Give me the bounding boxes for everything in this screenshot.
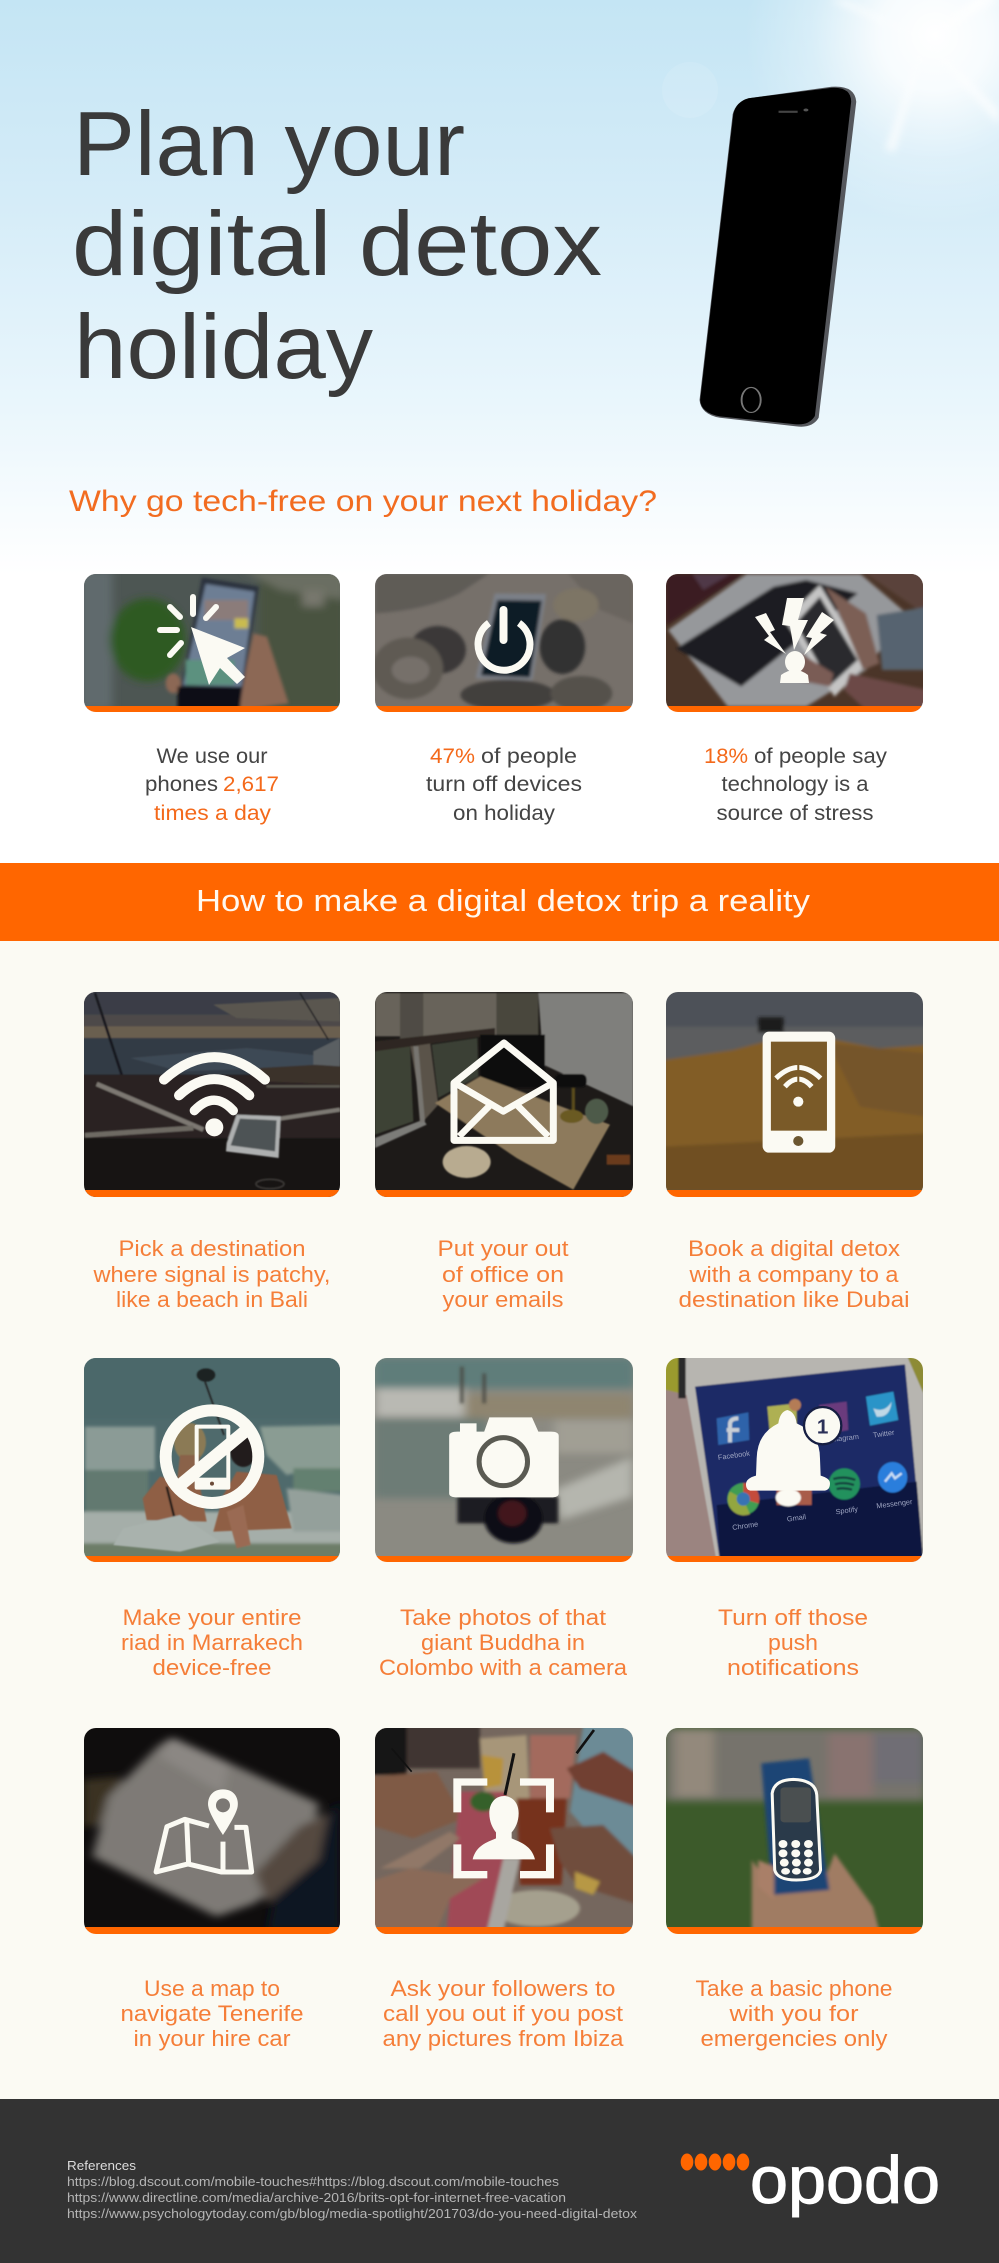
- text: phone use stat: times a day: [154, 802, 272, 825]
- panel: notifications card: Instagram: [826, 1432, 859, 1444]
- caption: Colombo: [379, 1605, 628, 1680]
- orange strip: [84, 1556, 340, 1562]
- caption: beach in Bali: [92, 1236, 330, 1312]
- caption: Ibiza: any pictures from Ibiza: [382, 2026, 624, 2051]
- orange strip: [666, 1927, 923, 1934]
- icon: bell with badge: 1: [817, 1416, 828, 1439]
- caption: basic phone: emergencies only: [700, 2026, 888, 2051]
- references: References: [67, 2159, 136, 2173]
- text: stress stat: of people say: [754, 745, 888, 768]
- caption: basic phone: Take a basic phone: [696, 1976, 892, 2001]
- caption: basic phone: [696, 1976, 892, 2051]
- text: turn off devices stat: of people: [481, 745, 577, 768]
- text: stress stat: [704, 745, 888, 825]
- caption: Dubai: with a company to a: [688, 1262, 899, 1287]
- caption: Marrakech: riad in Marrakech: [121, 1630, 303, 1655]
- text: phone use stat: [145, 745, 279, 825]
- orange strip: [666, 1190, 923, 1197]
- caption: Ibiza: call you out if you post: [383, 2001, 623, 2026]
- caption: notifications: Turn off those: [718, 1605, 868, 1630]
- orange banner: How to make a digital detox trip a reality: [196, 883, 811, 918]
- caption: Dubai: destination like Dubai: [678, 1287, 910, 1312]
- icon: phone with broken wifi: [763, 1032, 835, 1153]
- orange strip: [375, 1556, 633, 1562]
- caption: Marrakech: Make your entire: [122, 1605, 302, 1630]
- text: turn off devices stat: [426, 745, 582, 825]
- orange strip: [666, 1556, 923, 1562]
- references: https://blog.dscout.com/mobile-touches#https://blog.dscout.com/mobile-touches: [67, 2175, 559, 2189]
- panel: notifications card: [660, 1355, 930, 1568]
- caption: beach in Bali: like a beach in Bali: [116, 1287, 308, 1312]
- text: turn off devices stat: on holiday: [453, 802, 556, 825]
- caption: Colombo: Take photos of that: [400, 1605, 606, 1630]
- phone illustration: [700, 87, 856, 427]
- panel: stress photo card: [663, 570, 928, 712]
- text: phone use stat: phones: [145, 773, 218, 796]
- panel: power-off photo card: [367, 570, 638, 712]
- title: holiday: [74, 297, 374, 398]
- cream background: [0, 940, 999, 2100]
- text: stress stat: source of stress: [716, 802, 874, 825]
- icon: wifi: [164, 1057, 265, 1136]
- text: turn off devices stat: turn off devices: [426, 773, 582, 796]
- caption: out of office: of office on: [442, 1262, 564, 1287]
- caption: out of office: Put your out: [438, 1236, 568, 1261]
- icon: power button: [478, 610, 530, 670]
- opodo logo: opodo: [750, 2143, 940, 2218]
- icon: cursor click: [160, 597, 245, 685]
- icon: camera: [449, 1417, 559, 1497]
- icon: envelope: [454, 1043, 553, 1140]
- icon: basic phone outline: [772, 1779, 821, 1880]
- caption: Ibiza: [382, 1976, 624, 2051]
- orange strip: [84, 706, 340, 712]
- caption: Tenerife: Use a map to: [144, 1976, 280, 2001]
- caption: out of office: your emails: [442, 1287, 564, 1312]
- panel: no-device surf card: [80, 1355, 347, 1568]
- caption: Colombo: giant Buddha in: [421, 1630, 585, 1655]
- title: [72, 94, 602, 398]
- references: [67, 2159, 638, 2221]
- icon: map with pin: [156, 1789, 252, 1872]
- caption: notifications: notifications: [727, 1655, 859, 1680]
- orange strip: [375, 1190, 633, 1197]
- title: digital detox: [72, 194, 602, 295]
- references: https://www.directline.com/media/archive-2016/brits-opt-for-internet-free-vacation: [67, 2191, 566, 2205]
- caption: Tenerife: [120, 1976, 304, 2051]
- caption: Ibiza: Ask your followers to: [390, 1976, 616, 2001]
- caption: basic phone: with you for: [728, 2001, 858, 2026]
- orange strip: [375, 706, 633, 712]
- caption: Marrakech: device-free: [152, 1655, 272, 1680]
- panel: notifications card: Twitter: [872, 1428, 896, 1440]
- caption: beach in Bali: where signal is patchy,: [92, 1262, 330, 1287]
- caption: Tenerife: in your hire car: [134, 2026, 290, 2051]
- panel: desert phone card: [664, 992, 926, 1197]
- caption: Tenerife: navigate Tenerife: [120, 2001, 304, 2026]
- panel: basic phone card: [664, 1728, 926, 1934]
- references: https://www.psychologytoday.com/gb/blog/media-spotlight/201703/do-you-need-digital-detox: [67, 2207, 638, 2221]
- footer panel: [0, 2099, 999, 2263]
- sun glare: [662, 0, 999, 225]
- panel: notifications card: Gmail: [786, 1512, 807, 1524]
- panel: followers drinks card: [370, 1725, 640, 1938]
- caption: notifications: push: [768, 1630, 818, 1655]
- orange strip: [84, 1190, 340, 1197]
- text: turn off devices stat: 47%: [430, 745, 475, 768]
- icon: no phone: [166, 1410, 258, 1503]
- panel: wifi beach card: [80, 988, 347, 1201]
- icon: person in frame: [453, 1778, 554, 1878]
- title: Plan your: [73, 94, 465, 195]
- panel: notifications card: Facebook: [717, 1449, 751, 1462]
- caption: beach in Bali: Pick a destination: [118, 1236, 306, 1261]
- panel: notifications card: Chrome: [732, 1519, 759, 1532]
- caption: Dubai: Book a digital detox: [688, 1236, 900, 1261]
- orange strip: [84, 1927, 340, 1934]
- panel: phone use photo card: [80, 570, 346, 712]
- caption: Marrakech: [121, 1605, 303, 1680]
- caption: Colombo: Colombo with a camera: [379, 1655, 628, 1680]
- panel: notifications card: Messenger: [876, 1497, 913, 1510]
- panel: camera card: [373, 1357, 635, 1562]
- orange banner: [0, 863, 999, 941]
- sky background: [0, 0, 999, 575]
- icon: bell with badge: [746, 1407, 841, 1491]
- text: stress stat: 18%: [704, 745, 748, 768]
- caption: Dubai: [678, 1236, 910, 1312]
- orange strip: [375, 1927, 633, 1934]
- panel: map card: [83, 1728, 341, 1934]
- caption: out of office: [438, 1236, 568, 1312]
- icon: stress bolts and person: [755, 598, 834, 683]
- panel: notifications card: Spotify: [835, 1504, 859, 1516]
- text: phone use stat: We use our: [156, 745, 268, 768]
- orange strip: [666, 706, 923, 712]
- text: stress stat: technology is a: [722, 773, 869, 796]
- text: phone use stat: 2,617: [223, 773, 279, 796]
- panel: email office card: [370, 988, 637, 1201]
- section heading: why go tech-free: Why go tech-free on your next holiday?: [69, 485, 657, 518]
- caption: notifications: [718, 1605, 868, 1680]
